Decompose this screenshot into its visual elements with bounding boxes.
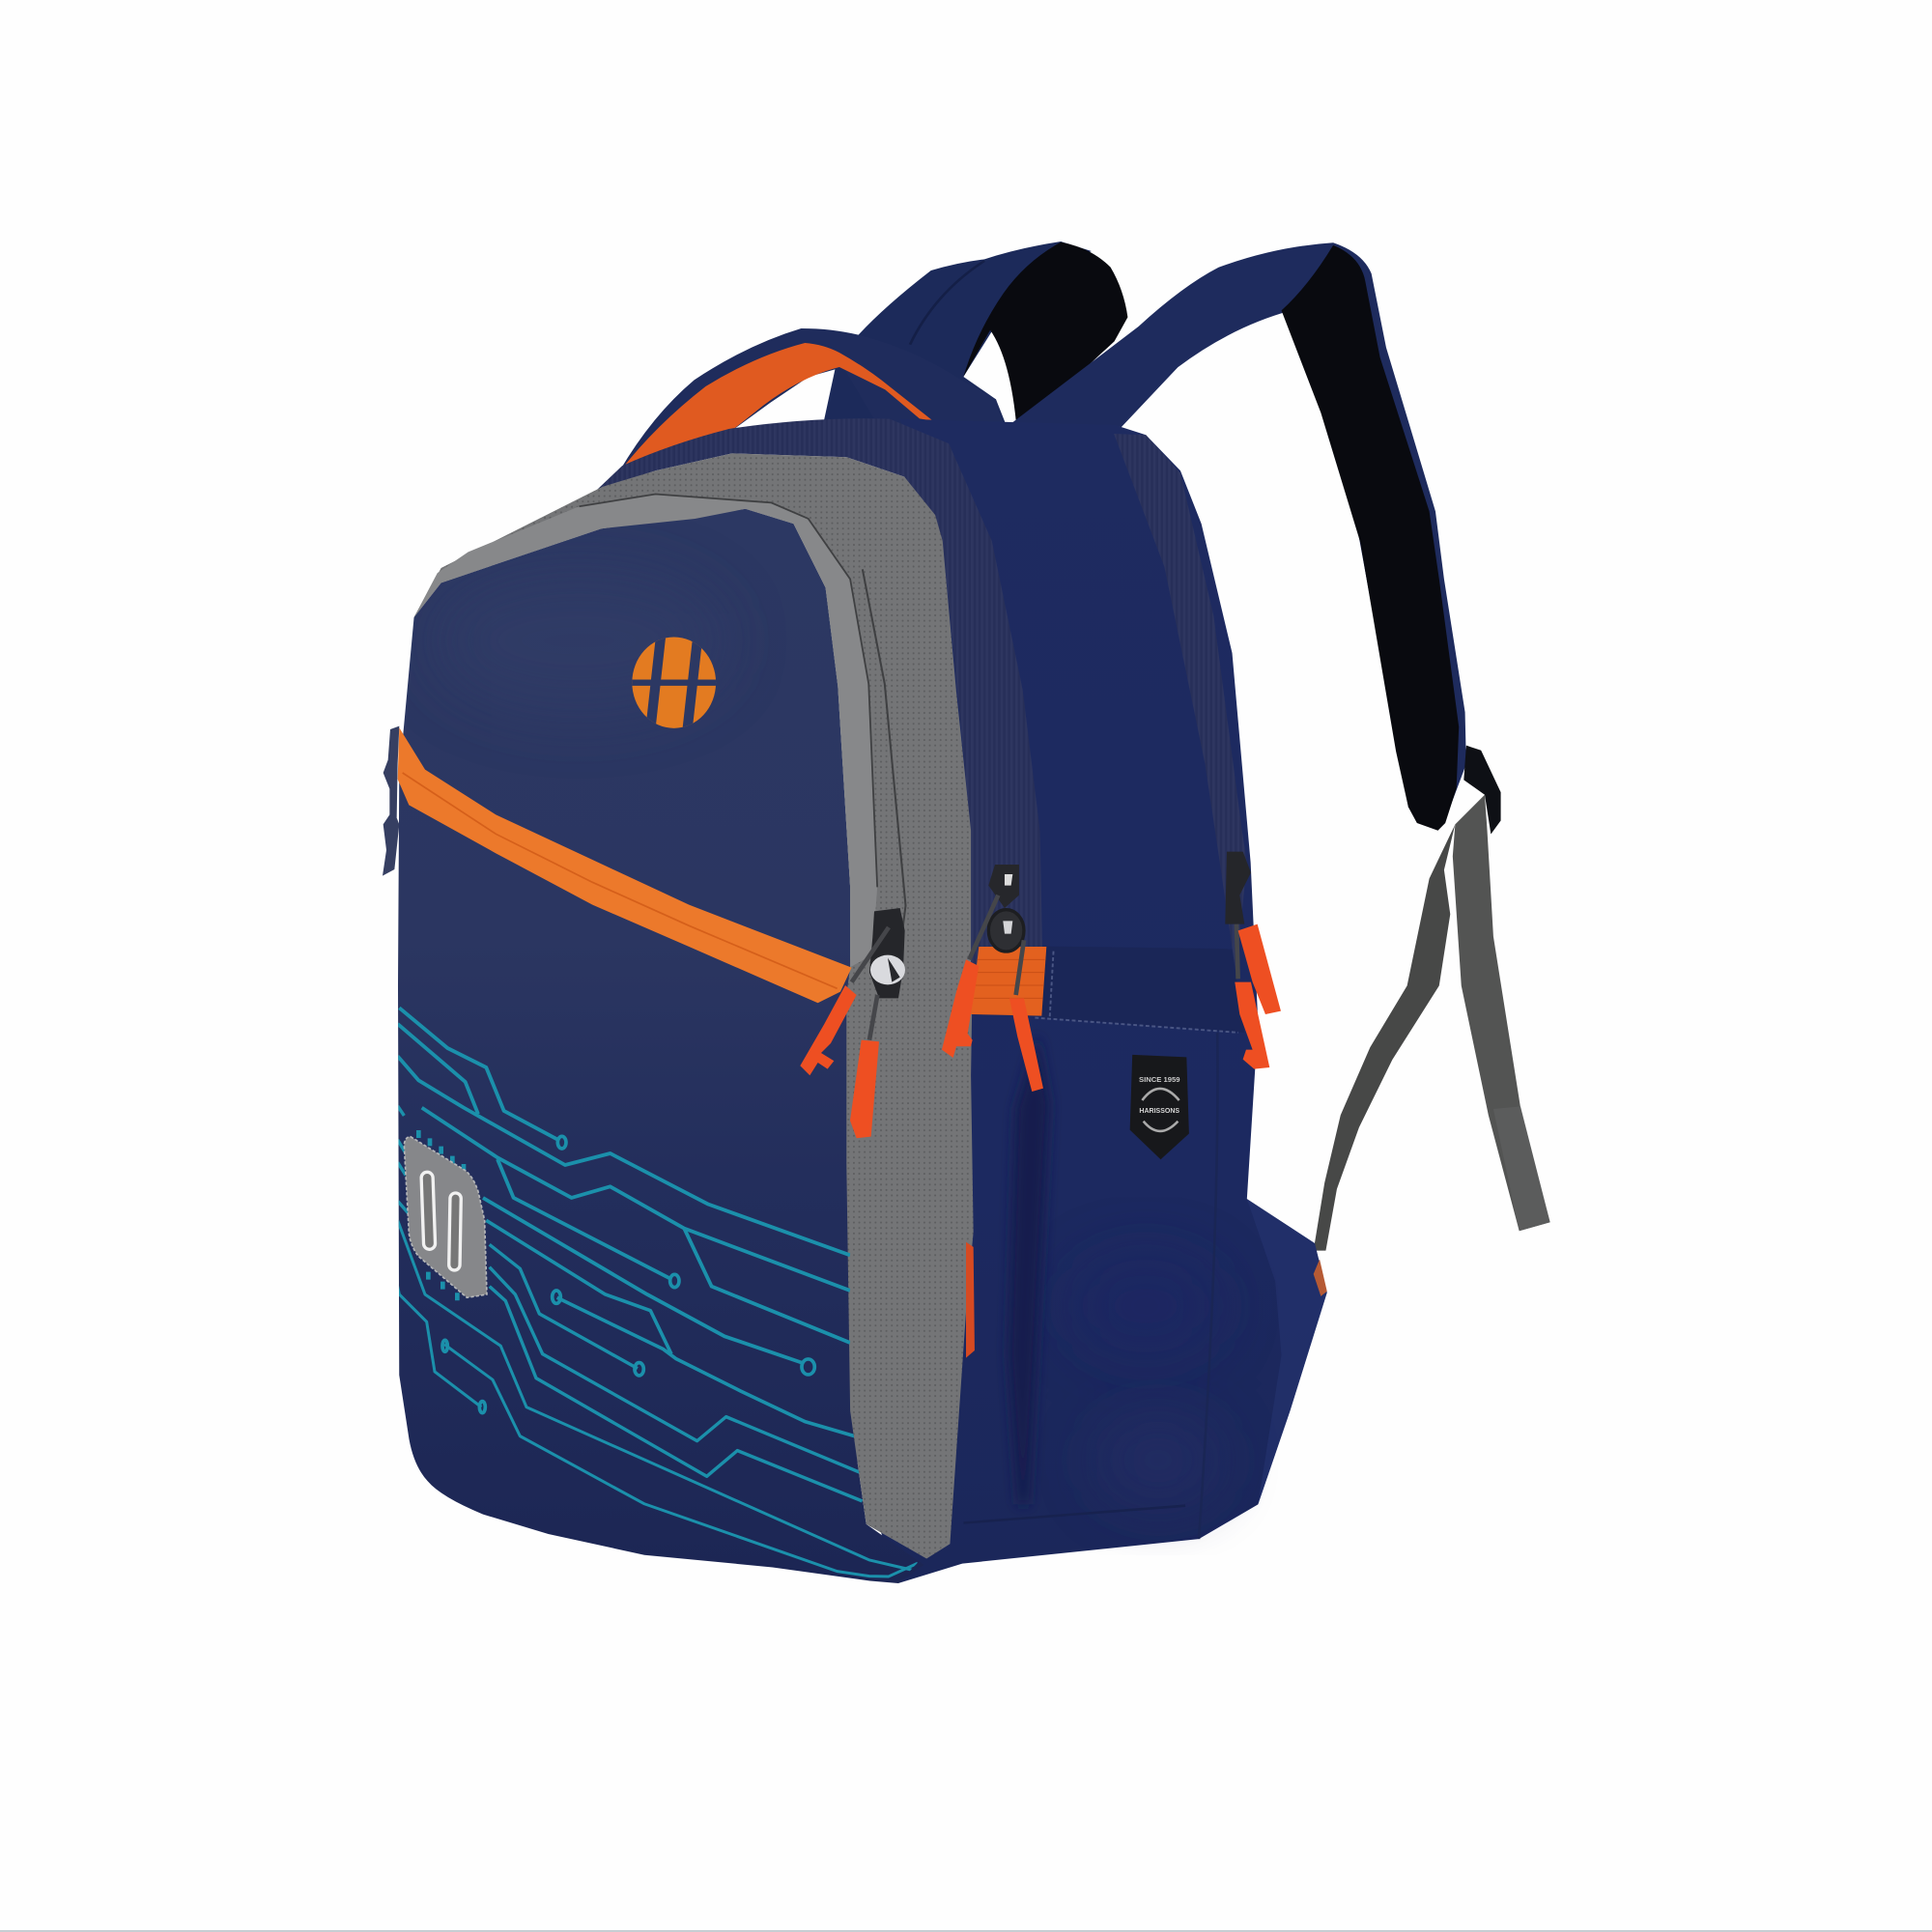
side lower pocket fold <box>963 947 1327 1539</box>
grey lower gusset <box>846 997 974 1559</box>
circuit line pattern <box>396 1008 918 1577</box>
front panel <box>398 509 924 1583</box>
right shoulder strap black padding <box>1282 245 1459 831</box>
top zipper band <box>596 418 1042 974</box>
bottom edge line <box>0 1930 1932 1932</box>
zipper sliders and cords <box>852 852 1251 1040</box>
backpack <box>383 242 1550 1583</box>
side zipper band <box>1114 434 1247 974</box>
orange zipper <box>398 727 852 1003</box>
logo <box>632 638 717 728</box>
orange zipper pulls <box>800 924 1281 1138</box>
reflective chip patch <box>404 1130 487 1300</box>
grey upper gusset <box>414 453 971 1005</box>
side panel <box>838 419 1327 1583</box>
brand badge <box>1130 1055 1189 1159</box>
brand badge: HARISSONS <box>1139 1108 1179 1115</box>
brand badge: SINCE 1959 <box>1139 1075 1179 1084</box>
circuit terminal dots <box>442 1136 814 1413</box>
side panel shading <box>1072 1257 1220 1503</box>
orange webbing loop <box>971 947 1046 1016</box>
grey webbing strap <box>1314 795 1550 1251</box>
top handle <box>620 328 1008 470</box>
front panel sheen <box>431 567 727 715</box>
left small zipper pull <box>383 726 399 876</box>
right shoulder strap navy <box>1005 242 1466 823</box>
orange tag on side gusset <box>966 1242 975 1358</box>
rear shoulder strap <box>820 242 1127 438</box>
strap side buckle <box>1463 746 1501 835</box>
